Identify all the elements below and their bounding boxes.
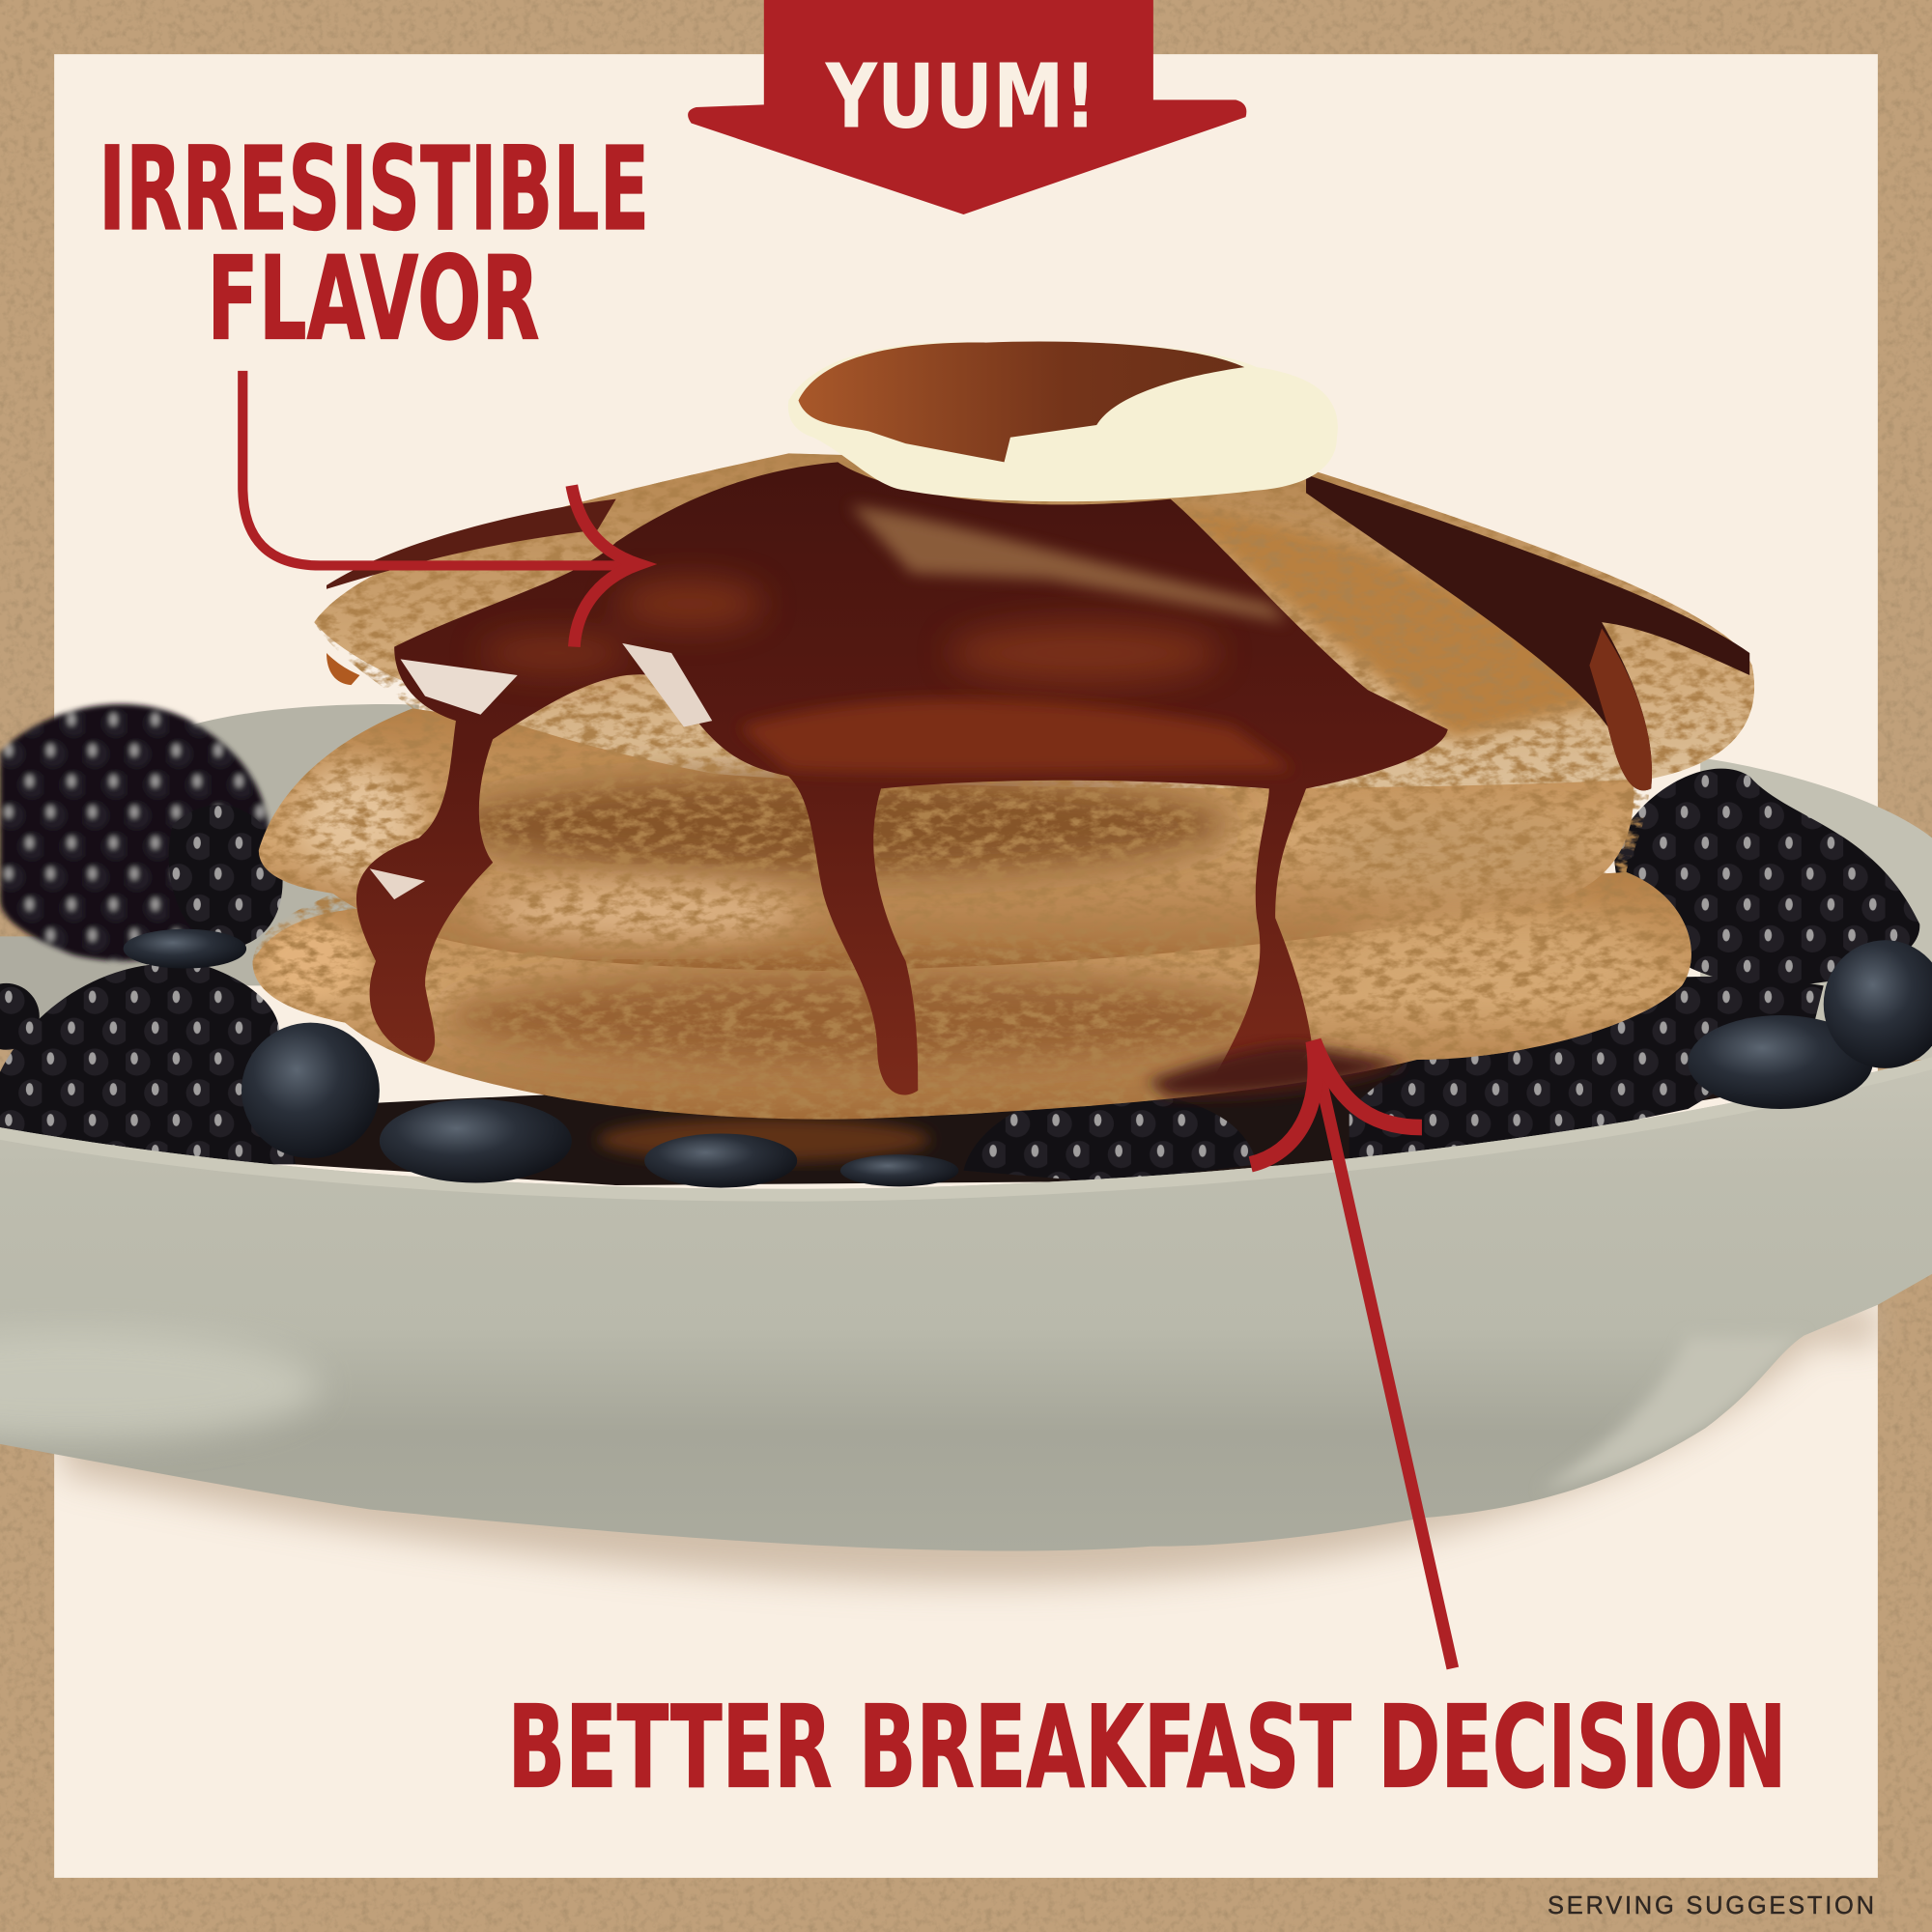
upper-left blackberry	[0, 704, 270, 961]
heading: irresistible flavor: IRRESISTIBLE	[99, 123, 649, 257]
butter pat	[788, 342, 1338, 501]
serving suggestion note: SERVING SUGGESTION	[1548, 1892, 1874, 1919]
syrup pooled on the plate	[598, 1118, 930, 1162]
upper-left small berry	[169, 805, 283, 949]
syrup pool at stack base	[1146, 1044, 1405, 1097]
main pool	[356, 462, 1448, 1095]
photo: pancakes with berries on a plate	[0, 342, 1932, 1583]
left edge berry	[0, 983, 40, 1050]
top pancake	[314, 453, 1754, 788]
plate soft lights	[0, 1331, 1804, 1491]
arrow: to syrup	[242, 371, 639, 647]
blueberries	[124, 929, 1932, 1188]
drip highlights	[401, 659, 518, 715]
lower-left blackberry	[0, 963, 370, 1164]
small orange drip on left edge	[327, 653, 359, 685]
right syrup	[1306, 474, 1749, 790]
pancake browned shading and texture	[246, 443, 1775, 1133]
rim highlight	[0, 1057, 1932, 1202]
ribbon text: YUUM!	[825, 44, 1096, 148]
plate front	[0, 1057, 1932, 1551]
bottom blackberry	[963, 1091, 1257, 1182]
dark food bed	[283, 1010, 1725, 1185]
syrup orange glow	[739, 699, 1293, 773]
syrup warm highlights	[480, 579, 1220, 683]
ribbon arrow	[688, 0, 1246, 214]
bottom pancake	[252, 872, 1691, 1120]
upper-right blackberries	[1614, 769, 1919, 985]
left rim syrup	[327, 499, 616, 589]
right drip	[1589, 629, 1652, 790]
syrup	[327, 462, 1749, 1097]
lower-right blackberry	[1350, 977, 1824, 1158]
middle pancake	[259, 708, 1634, 971]
plate back rim	[0, 704, 1932, 1060]
plate shadow	[62, 1306, 1878, 1583]
arrow: to pancake stack	[1251, 1041, 1453, 1668]
syrup translucent left sheen	[850, 505, 1288, 622]
heading: irresistible flavor	[99, 123, 649, 367]
heading: irresistible flavor: FLAVOR	[207, 233, 540, 367]
